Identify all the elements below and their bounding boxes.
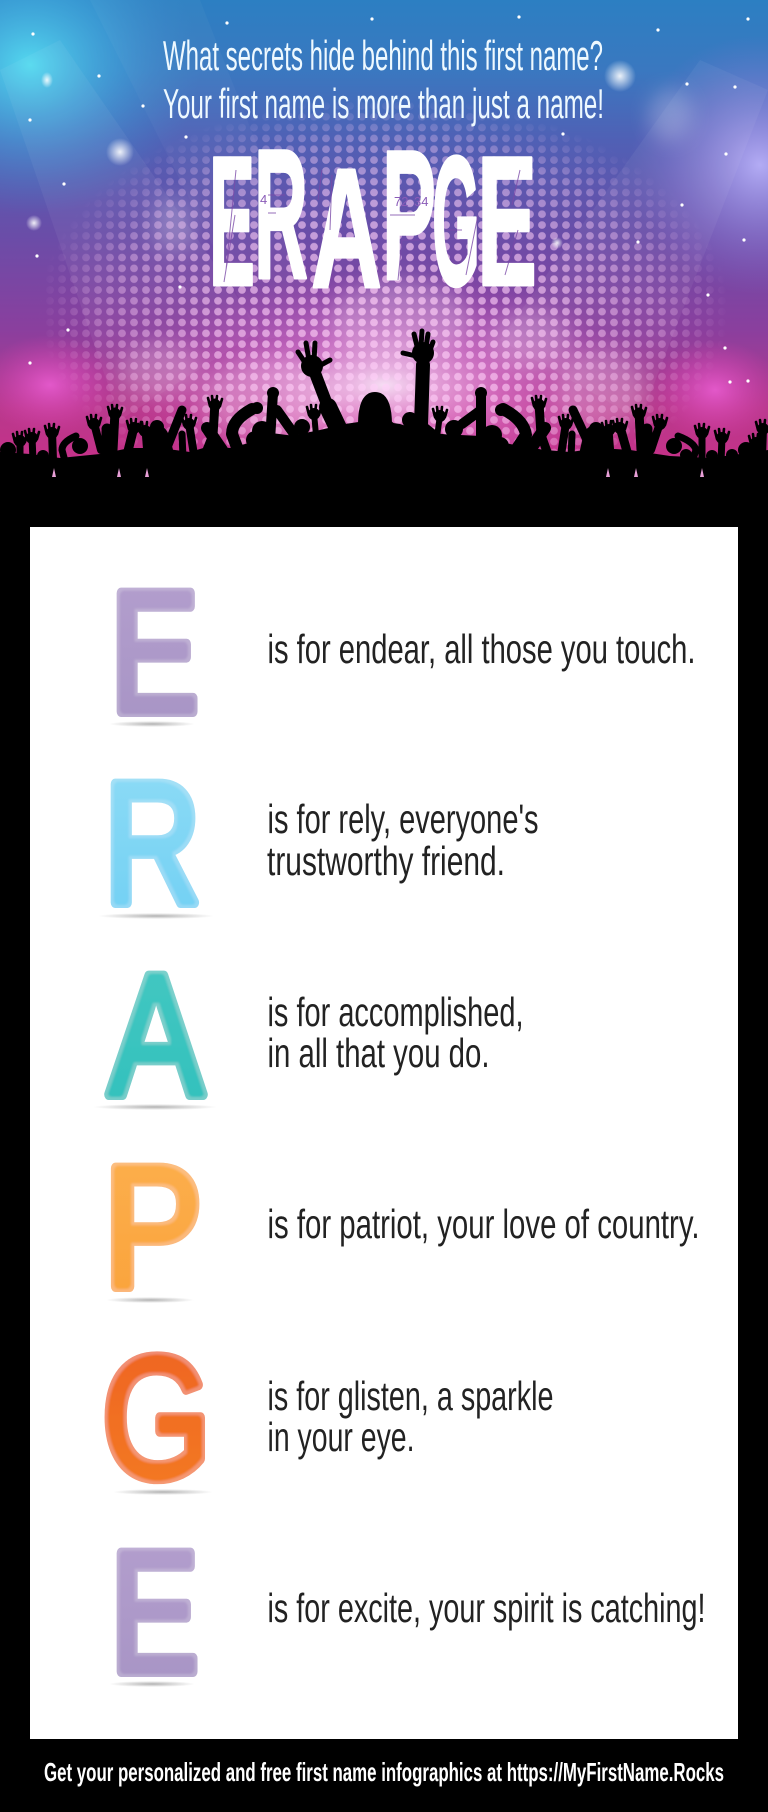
text: in your eye. xyxy=(268,1414,414,1460)
heading lines xyxy=(163,32,604,127)
panel: meanings xyxy=(30,527,738,1739)
name title: G xyxy=(432,119,480,325)
text xyxy=(268,989,524,1076)
grunge numerals xyxy=(260,192,428,209)
text: is for rely, everyone's xyxy=(268,796,538,842)
text: in all that you do. xyxy=(268,1030,490,1076)
text: is for accomplished, xyxy=(268,989,524,1035)
row: R rely xyxy=(98,748,538,940)
icon: letter E: E xyxy=(110,556,199,748)
crowd: hands xyxy=(13,396,768,449)
shadow xyxy=(98,913,214,919)
row: E excite xyxy=(109,1516,706,1708)
text: E xyxy=(477,119,537,325)
shadow xyxy=(106,1297,194,1303)
name title: R xyxy=(254,112,308,318)
crowd silhouette xyxy=(0,331,768,530)
grunge numerals: 34 xyxy=(414,194,428,209)
icon: letter A: A xyxy=(108,940,204,1132)
crowd: large raised left hand xyxy=(298,343,330,377)
row: P patriot xyxy=(104,1132,700,1324)
text xyxy=(267,796,538,884)
text: is for glisten, a sparkle xyxy=(268,1373,554,1419)
crowd: large raised right hand xyxy=(403,331,434,364)
name title xyxy=(209,112,537,325)
crowd: heads xyxy=(0,387,754,462)
row: E endear xyxy=(109,556,696,748)
text xyxy=(268,1373,554,1460)
row: G glisten xyxy=(102,1322,554,1514)
crowd: arms xyxy=(20,365,763,465)
text: trustworthy friend. xyxy=(267,838,505,884)
icon: letter P: P xyxy=(104,1132,202,1324)
header: concert background xyxy=(0,0,768,500)
grunge numerals: 72 xyxy=(394,194,408,209)
grunge numerals: 4 xyxy=(260,192,267,207)
shadow xyxy=(109,1681,195,1687)
name title: A xyxy=(311,134,382,324)
icon: letter G: G xyxy=(102,1322,211,1514)
name title: P xyxy=(382,113,436,319)
icon: letter R: R xyxy=(104,748,201,940)
icon: letter E: E xyxy=(110,1516,199,1708)
row: A accomplished xyxy=(93,940,524,1132)
shadow xyxy=(109,721,195,727)
shadow xyxy=(113,1489,213,1495)
name title: E xyxy=(209,119,255,325)
grunge scratches xyxy=(224,170,520,282)
shadow xyxy=(93,1104,217,1110)
